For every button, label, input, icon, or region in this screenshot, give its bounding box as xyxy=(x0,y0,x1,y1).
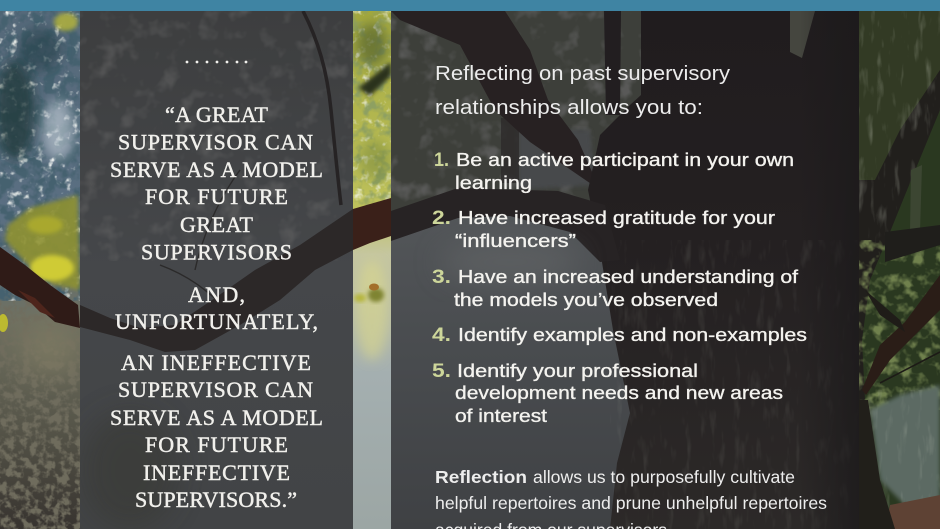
quote text: great supervisor: SUPERVISOR CAN xyxy=(118,130,313,154)
list item 3: the models you’ve observed xyxy=(454,289,718,310)
quote text: great supervisor: SUPERVISORS xyxy=(141,240,292,264)
closing paragraph: helpful repertoires and prune unhelpful repertoires xyxy=(435,493,827,513)
list item 2 xyxy=(432,210,775,248)
quote text: great supervisor: “A GREAT xyxy=(165,102,269,127)
panel: reflection benefits xyxy=(391,11,859,529)
list item 5: Identify your professional xyxy=(457,360,698,381)
list item 3 xyxy=(432,266,799,310)
quote text: great supervisor xyxy=(110,102,323,264)
quote text: great supervisor: SERVE AS A MODEL xyxy=(110,157,323,182)
list item 1: Be an active participant in your own xyxy=(456,149,794,170)
list item 2: “influencers” xyxy=(455,230,576,251)
list item 5: of interest xyxy=(455,405,547,426)
quote text: ineffective supervisor: INEFFECTIVE xyxy=(143,460,290,485)
closing paragraph: Reflection xyxy=(435,467,527,487)
decorative dots xyxy=(186,61,247,63)
intro heading xyxy=(435,63,730,119)
list item 1: learning xyxy=(455,172,532,193)
list item 4: 4. xyxy=(432,324,451,346)
quote text: and, unfortunately: AND, xyxy=(188,282,245,307)
photo strip: right tree and forest xyxy=(859,11,940,529)
list item 4: Identify examples and non-examples xyxy=(458,324,807,345)
list item 2: Have increased gratitude for your xyxy=(458,207,775,228)
quote text: ineffective supervisor: SUPERVISORS.” xyxy=(135,487,297,512)
quote text: and, unfortunately xyxy=(115,287,317,332)
quote text: great supervisor: GREAT xyxy=(180,212,254,237)
quote text: great supervisor: FOR FUTURE xyxy=(145,184,288,209)
intro heading: Reflecting on past supervisory xyxy=(435,63,730,85)
photo strip: centre canopy xyxy=(353,11,391,529)
photo strip: left forest xyxy=(0,11,80,529)
quote text: and, unfortunately: UNFORTUNATELY, xyxy=(115,309,318,334)
intro heading: relationships allows you to: xyxy=(435,97,703,119)
list item 5: development needs and new areas xyxy=(455,382,783,403)
list item 3: 3. xyxy=(432,266,451,288)
list item 1 xyxy=(434,149,794,193)
list item 3: Have an increased understanding of xyxy=(458,266,799,287)
list item 1: 1. xyxy=(434,149,449,171)
closing paragraph xyxy=(435,467,827,529)
quote text: ineffective supervisor: SERVE AS A MODEL xyxy=(110,405,323,430)
top header bar xyxy=(0,0,940,11)
list item 5: 5. xyxy=(432,360,451,382)
quote text: ineffective supervisor xyxy=(110,350,323,512)
quote text: ineffective supervisor: AN INEFFECTIVE xyxy=(121,350,311,375)
quote text: ineffective supervisor: SUPERVISOR CAN xyxy=(118,377,313,402)
list item 2: 2. xyxy=(432,207,451,229)
panel: quote xyxy=(80,11,353,529)
quote text: ineffective supervisor: FOR FUTURE xyxy=(145,432,288,457)
list item 4 xyxy=(432,327,806,346)
list item 5 xyxy=(432,363,782,422)
closing paragraph: allows us to purposefully cultivate xyxy=(533,467,795,487)
